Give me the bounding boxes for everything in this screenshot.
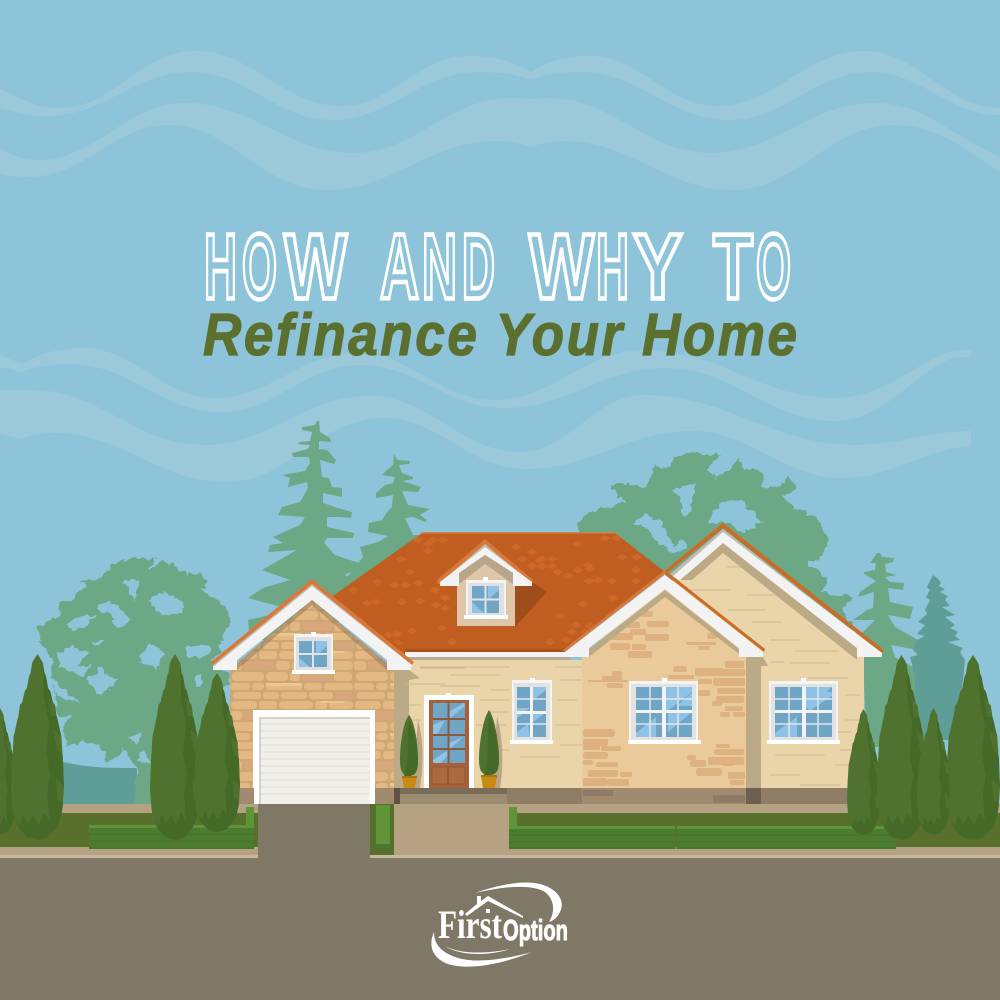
background pine: left small (345, 454, 440, 580)
heading: How and why to: T (713, 214, 753, 318)
back gable wall (600, 540, 870, 788)
stone garage wing (230, 598, 394, 788)
ground: lawn (0, 813, 1000, 848)
driveway (258, 804, 370, 858)
evergreen trees right (847, 655, 1000, 840)
front steps (394, 788, 507, 804)
heading: How and why to: W (284, 214, 347, 318)
gable window (292, 632, 335, 674)
planter left (400, 715, 423, 788)
heading: How and why to: H (204, 214, 237, 318)
road (0, 858, 1000, 1000)
heading: How and why to: D (462, 214, 495, 318)
window: back gable (767, 678, 840, 744)
background tree: left oak (35, 557, 232, 806)
window: front gable (628, 678, 701, 744)
logo name: First (438, 902, 503, 947)
siding lines on back wall (690, 567, 863, 785)
background pine: right large (853, 553, 937, 747)
main wall (394, 660, 584, 788)
main roof (330, 533, 665, 662)
background hill (0, 760, 137, 806)
dormer shadow on roof (515, 583, 547, 627)
back gable trim (663, 523, 884, 660)
heading: How and why to: O (242, 214, 277, 318)
dormer window (464, 577, 508, 619)
heading: How and why to: H (596, 214, 629, 318)
heading: How and why to: Y (633, 214, 682, 318)
front gable wall (582, 593, 746, 788)
roof shingle highlights (348, 534, 642, 646)
sky waves top (0, 51, 1000, 190)
left gable trim (211, 579, 414, 670)
heading: How and why to: N (422, 214, 457, 318)
siding lines on main wall (405, 667, 583, 757)
background pine: right teal (910, 575, 965, 740)
small hedge strip (370, 804, 394, 855)
walkway (394, 804, 509, 855)
ground: curb (0, 847, 1000, 855)
foundation (230, 788, 848, 804)
evergreen trees left (0, 654, 240, 840)
vertical shadow between gables (746, 657, 768, 788)
sky waves middle (0, 348, 971, 482)
background pine: left large (248, 421, 372, 640)
front gable trim (563, 570, 765, 657)
logo: First Option (431, 882, 568, 967)
house (211, 523, 884, 804)
ground: sidewalk strip (0, 804, 1000, 814)
logo top swoosh (475, 882, 562, 922)
logo bottom swoosh (431, 932, 532, 967)
wall shadow under gable (394, 660, 420, 788)
door (424, 693, 474, 788)
subheading: Refinance Your Home: Refinance Your Home (203, 301, 797, 368)
main fascia (405, 652, 570, 657)
title (203, 214, 797, 368)
hedge right (509, 807, 896, 849)
heading: How and why to: A (380, 214, 419, 318)
planter right (479, 710, 502, 788)
hedge left (89, 807, 254, 849)
dormer (437, 539, 533, 626)
garage door (253, 710, 375, 804)
window: left main wall (510, 678, 553, 744)
stone patches on front gable (583, 611, 745, 786)
heading: How and why to: W (529, 214, 594, 318)
logo: First Option: Option (503, 915, 568, 947)
background tree: right oak (577, 453, 860, 660)
logo roof (465, 896, 523, 918)
title: O (756, 214, 791, 318)
